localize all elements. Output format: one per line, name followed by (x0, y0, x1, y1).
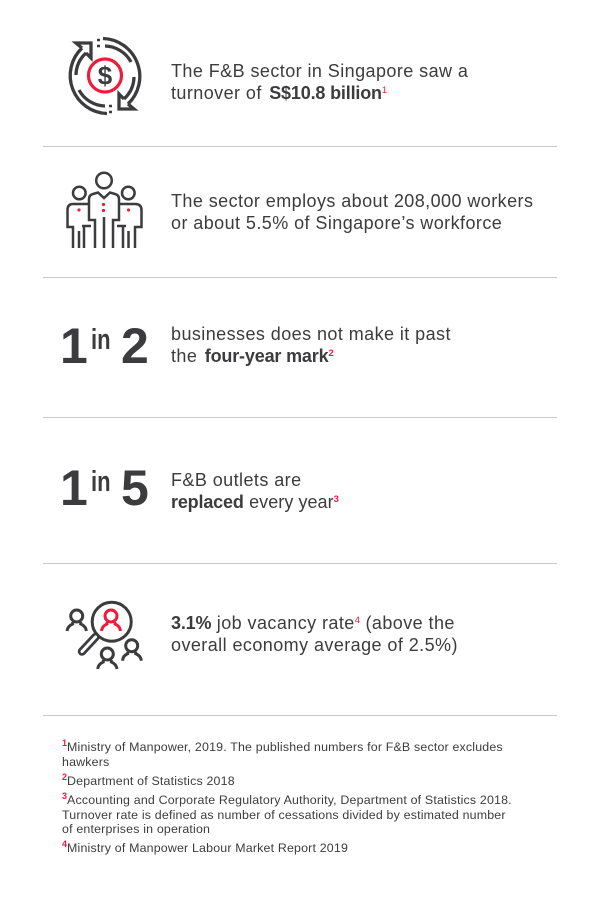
heading text: turnover: turnover of S$10.8 billion1 (171, 83, 387, 103)
text: job vacancy (171, 613, 458, 655)
stat: 1 in 2: in (90, 324, 110, 356)
stat: 1 in 2: 1 (60, 318, 88, 374)
footnotes: 4Ministry of Manpower Labour Market Report 2019 (62, 839, 348, 855)
heading text: turnover: The F&B sector in Singapore saw a (171, 61, 468, 81)
text: four-year mark: businesses does not make it past (171, 324, 451, 344)
stat: 1 in 5 (60, 460, 149, 516)
footnotes: 1Ministry of Manpower, 2019. The published numbers for F&B sector excludes (62, 738, 503, 754)
text: four-year mark: the four-year mark2 (171, 346, 334, 366)
footnotes: Turnover rate is defined as number of cessations divided by estimated number (62, 808, 506, 822)
icon: circular money arrows: $ (98, 60, 113, 90)
icon: magnifier over people (66, 600, 143, 670)
footnotes: of enterprises in operation (62, 822, 210, 836)
footnotes: hawkers (62, 754, 109, 768)
text: employment: The sector employs about 208,000 workers (171, 191, 533, 211)
stat: 1 in 5: in (90, 466, 110, 498)
text: job vacancy: overall economy average of 2.5%) (171, 635, 458, 655)
text: outlets replaced (171, 470, 339, 512)
text: outlets replaced: F&B outlets are (171, 470, 302, 490)
stat: 1 in 5: 1 (60, 460, 88, 516)
footnotes: 3Accounting and Corporate Regulatory Authority, Department of Statistics 2018. (62, 791, 512, 807)
text: outlets replaced: replaced every year3 (171, 492, 339, 512)
icon: three workers (66, 172, 143, 248)
footnotes: 2Department of Statistics 2018 (62, 772, 235, 788)
stat: 1 in 5: 5 (121, 460, 149, 516)
icon: circular money arrows (68, 36, 142, 116)
text: employment (171, 191, 533, 233)
stat: 1 in 2: 2 (121, 318, 149, 374)
stat: 1 in 2 (60, 318, 149, 374)
text: four-year mark (171, 324, 451, 366)
heading text: turnover (171, 61, 468, 103)
footnotes (62, 738, 512, 855)
text: employment: or about 5.5% of Singapore’s workforce (171, 213, 502, 233)
text: job vacancy: 3.1% job vacancy rate4 (above the (171, 613, 455, 633)
